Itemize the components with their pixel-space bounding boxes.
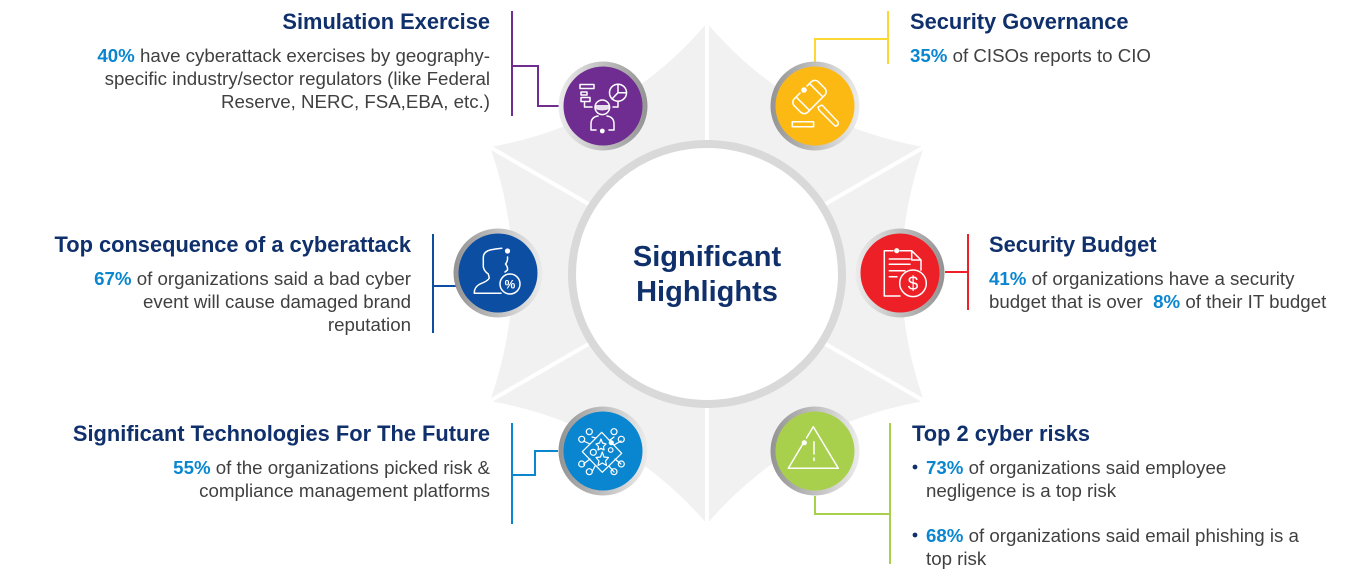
- icon: warning triangle: [770, 406, 860, 496]
- title: simulation exercise: Simulation Exercise: [282, 9, 490, 34]
- title: top consequence: Top consequence of a cyberattack: [54, 232, 412, 257]
- text: simulation exercise: [97, 45, 490, 112]
- text: simulation exercise: 40% have cyberattack exercises by geography-: [97, 45, 490, 66]
- text: significant technologies: 55% of the organizations picked risk &: [173, 457, 491, 478]
- panel: security governance: [770, 9, 1151, 150]
- text: top consequence: [94, 268, 411, 335]
- icon: circuit network: [558, 406, 648, 496]
- panel: security budget: [856, 228, 1327, 318]
- central ring with title: [572, 144, 842, 404]
- text: risk bullets: negligence is a top risk: [926, 480, 1117, 501]
- text: top consequence: 67% of organizations said a bad cyber: [94, 268, 411, 289]
- icon: simulation exercise: [558, 62, 648, 150]
- connector: blue: [512, 423, 558, 524]
- text: top consequence: event will cause damaged brand: [143, 291, 411, 312]
- central ring with title: Highlights: [636, 276, 778, 308]
- text: simulation exercise: specific industry/sector regulators (like Federal: [105, 68, 490, 89]
- title: security budget: Security Budget: [989, 232, 1156, 257]
- text: security budget: 41% of organizations have a security: [989, 268, 1295, 289]
- panel: significant technologies: [73, 406, 648, 524]
- connector: dark blue: [433, 234, 460, 333]
- icon: gavel: [770, 62, 860, 150]
- icon: budget document: [856, 228, 944, 318]
- text: top consequence: reputation: [328, 314, 411, 335]
- icon: budget document: $: [908, 274, 919, 295]
- panel: simulation exercise: [97, 9, 648, 150]
- text: significant technologies: [173, 457, 491, 501]
- connector: green: [815, 423, 890, 564]
- panel: top consequence: [54, 228, 542, 335]
- text: security budget: [989, 268, 1327, 312]
- connector: red: [945, 234, 968, 310]
- icon: person with percent: [454, 228, 542, 318]
- title: security governance: Security Governance: [910, 9, 1129, 34]
- text: risk bullets: 68% of organizations said email phishing is a: [926, 525, 1300, 546]
- title: significant technologies: Significant Technologies For The Future: [73, 421, 490, 446]
- connector: yellow: [815, 11, 888, 64]
- background star shape: [488, 20, 926, 528]
- text: risk bullets: top risk: [926, 548, 987, 569]
- icon: person with percent: %: [505, 278, 516, 292]
- connector: purple: [512, 11, 563, 116]
- title: top 2 cyber risks: Top 2 cyber risks: [912, 421, 1090, 446]
- panel: top 2 cyber risks: [770, 406, 1300, 569]
- text: security governance: 35% of CISOs reports to CIO: [910, 45, 1151, 66]
- text: security budget: budget that is over 8% of their IT budget: [989, 291, 1327, 312]
- text: significant technologies: compliance management platforms: [199, 480, 490, 501]
- central ring with title: Significant: [633, 241, 781, 273]
- text: simulation exercise: Reserve, NERC, FSA,EBA, etc.): [221, 91, 490, 112]
- text: risk bullets: [913, 457, 1300, 569]
- text: risk bullets: 73% of organizations said employee: [926, 457, 1226, 478]
